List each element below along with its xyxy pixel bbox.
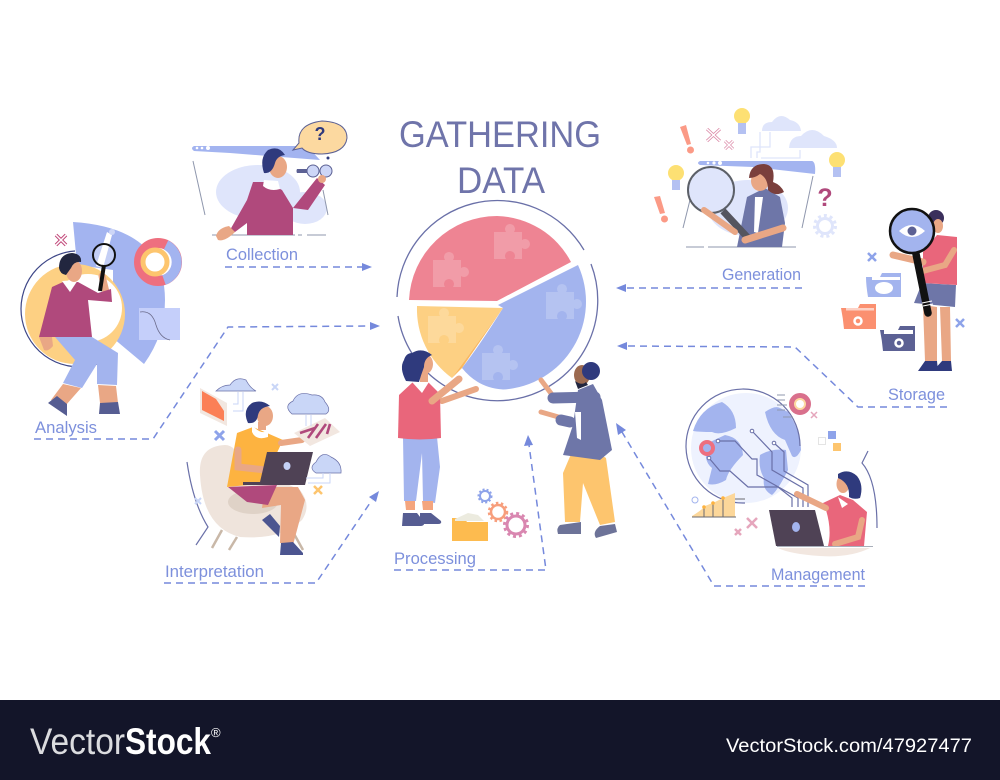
man holding pie [541, 362, 617, 538]
head [751, 171, 769, 191]
head [269, 156, 287, 178]
forearm [102, 276, 106, 292]
shoes [557, 522, 617, 538]
top [823, 495, 867, 546]
browser bar [698, 161, 815, 174]
browser bar [192, 146, 320, 160]
magnifier [916, 254, 928, 313]
skirt [228, 485, 277, 505]
chair [200, 445, 307, 537]
label: Analysis: Analysis [35, 418, 97, 437]
puzzle pieces [428, 224, 582, 380]
window lines [683, 176, 813, 247]
continents [693, 402, 736, 433]
donut chart [139, 243, 177, 281]
collar [252, 425, 268, 438]
trousers [563, 440, 615, 525]
orange card [200, 388, 227, 426]
woman holding pie [398, 350, 476, 526]
title: GATHERING [399, 114, 601, 155]
jacket [737, 188, 785, 247]
globe outline [686, 389, 800, 503]
blob [216, 165, 300, 219]
shoes [918, 361, 952, 371]
arrow: storage to pie [617, 342, 947, 407]
analysis scene [21, 222, 180, 416]
bulbs [668, 108, 845, 190]
label: Collection: Collection [226, 245, 298, 264]
label: Management: Management [771, 565, 865, 584]
speech bubble [293, 121, 347, 154]
arms [238, 450, 266, 470]
pie outer ring [397, 201, 598, 401]
head [66, 260, 82, 282]
cloud wires [233, 392, 330, 483]
top [227, 427, 283, 487]
forearms [541, 380, 562, 418]
shoes [402, 513, 441, 526]
collection scene: ? [314, 124, 326, 144]
sleeves [553, 397, 595, 422]
arrow: generation to pie [616, 284, 802, 292]
yellow slice [417, 306, 503, 378]
chart square [139, 308, 180, 340]
logo: Vector [30, 721, 125, 762]
navy arc [21, 251, 97, 367]
chair legs [212, 530, 303, 550]
central pie chart [397, 201, 598, 401]
blue fan [73, 222, 165, 364]
head [574, 365, 590, 385]
hair [402, 350, 432, 382]
head [417, 354, 433, 374]
squares [828, 431, 836, 439]
desk [777, 546, 873, 548]
hair [262, 148, 285, 173]
hair [59, 253, 81, 275]
blob [708, 180, 788, 236]
footer bar [0, 700, 1000, 780]
shoes [48, 396, 120, 416]
jacket [563, 384, 612, 460]
laptop [243, 452, 313, 485]
folder [452, 518, 488, 541]
binoculars [296, 169, 316, 173]
image id: VectorStock.com/47927477 [726, 736, 972, 757]
white strip [96, 232, 112, 268]
left hand [216, 226, 235, 240]
stacked lines near donut [777, 395, 793, 417]
collection scene [192, 121, 347, 240]
label: Generation: Generation [722, 265, 801, 284]
title: DATA [457, 160, 545, 201]
legs [405, 501, 433, 510]
clouds [216, 379, 256, 391]
yellow ring [25, 264, 125, 364]
exclamation marks [654, 125, 694, 222]
legs [51, 384, 118, 405]
cross icon [56, 235, 66, 245]
arrow: management to pie [616, 423, 865, 586]
folders [866, 273, 901, 297]
second arm [442, 389, 476, 401]
arrow: analysis to pie [34, 322, 380, 439]
logo: Stock [125, 721, 211, 762]
arrow: processing to pie [394, 435, 546, 570]
front arm [432, 379, 459, 401]
shirt [398, 382, 441, 440]
gear [818, 218, 832, 234]
right curve [862, 451, 877, 528]
crosses [272, 384, 278, 390]
tablet card [294, 418, 340, 446]
interpretation scene [187, 379, 341, 555]
donuts [792, 396, 808, 412]
clouds [762, 116, 801, 131]
shoes [262, 514, 303, 555]
arms [893, 255, 923, 262]
crosses [868, 253, 964, 327]
label: Storage: Storage [888, 385, 945, 404]
sweater [230, 178, 325, 235]
question mark: ? [817, 184, 833, 212]
pants [55, 337, 118, 388]
processing folder and gears [452, 490, 528, 541]
arrow: collection to pie [225, 263, 372, 271]
collar [62, 280, 78, 292]
head [836, 475, 850, 493]
storage scene [841, 209, 964, 371]
magnifier [688, 167, 734, 213]
window lines [193, 161, 328, 235]
eye [899, 225, 925, 237]
blue slice [462, 265, 586, 390]
legs [923, 305, 951, 361]
title [399, 114, 601, 201]
hair [749, 164, 784, 194]
desk shadow [778, 548, 870, 556]
hair [582, 362, 600, 380]
collar [838, 497, 848, 508]
logo: ® [211, 725, 221, 740]
label: Processing: Processing [394, 549, 476, 568]
hair [838, 471, 861, 499]
management scene [686, 389, 877, 556]
globe [691, 393, 801, 503]
circuit wires [751, 132, 800, 158]
circuit lines [707, 429, 808, 507]
hair [246, 402, 270, 423]
label: Interpretation: Interpretation [165, 562, 264, 581]
generation scene [654, 108, 845, 247]
legs [262, 487, 305, 545]
logo [30, 721, 221, 762]
arrow: interpretation to pie [164, 491, 379, 583]
head [257, 406, 273, 426]
laptop [769, 510, 824, 546]
area chart [692, 493, 735, 517]
red slice [409, 216, 571, 301]
hair [928, 210, 944, 226]
crosses [707, 129, 733, 149]
gears [480, 491, 490, 501]
arms [704, 210, 735, 232]
top [923, 235, 957, 285]
left curve [187, 462, 208, 545]
pants [403, 437, 440, 503]
shorts [914, 283, 956, 307]
arms [797, 494, 826, 508]
magnifier [100, 265, 104, 291]
sweater [39, 282, 112, 337]
crosses [735, 518, 757, 535]
collar [263, 180, 280, 190]
